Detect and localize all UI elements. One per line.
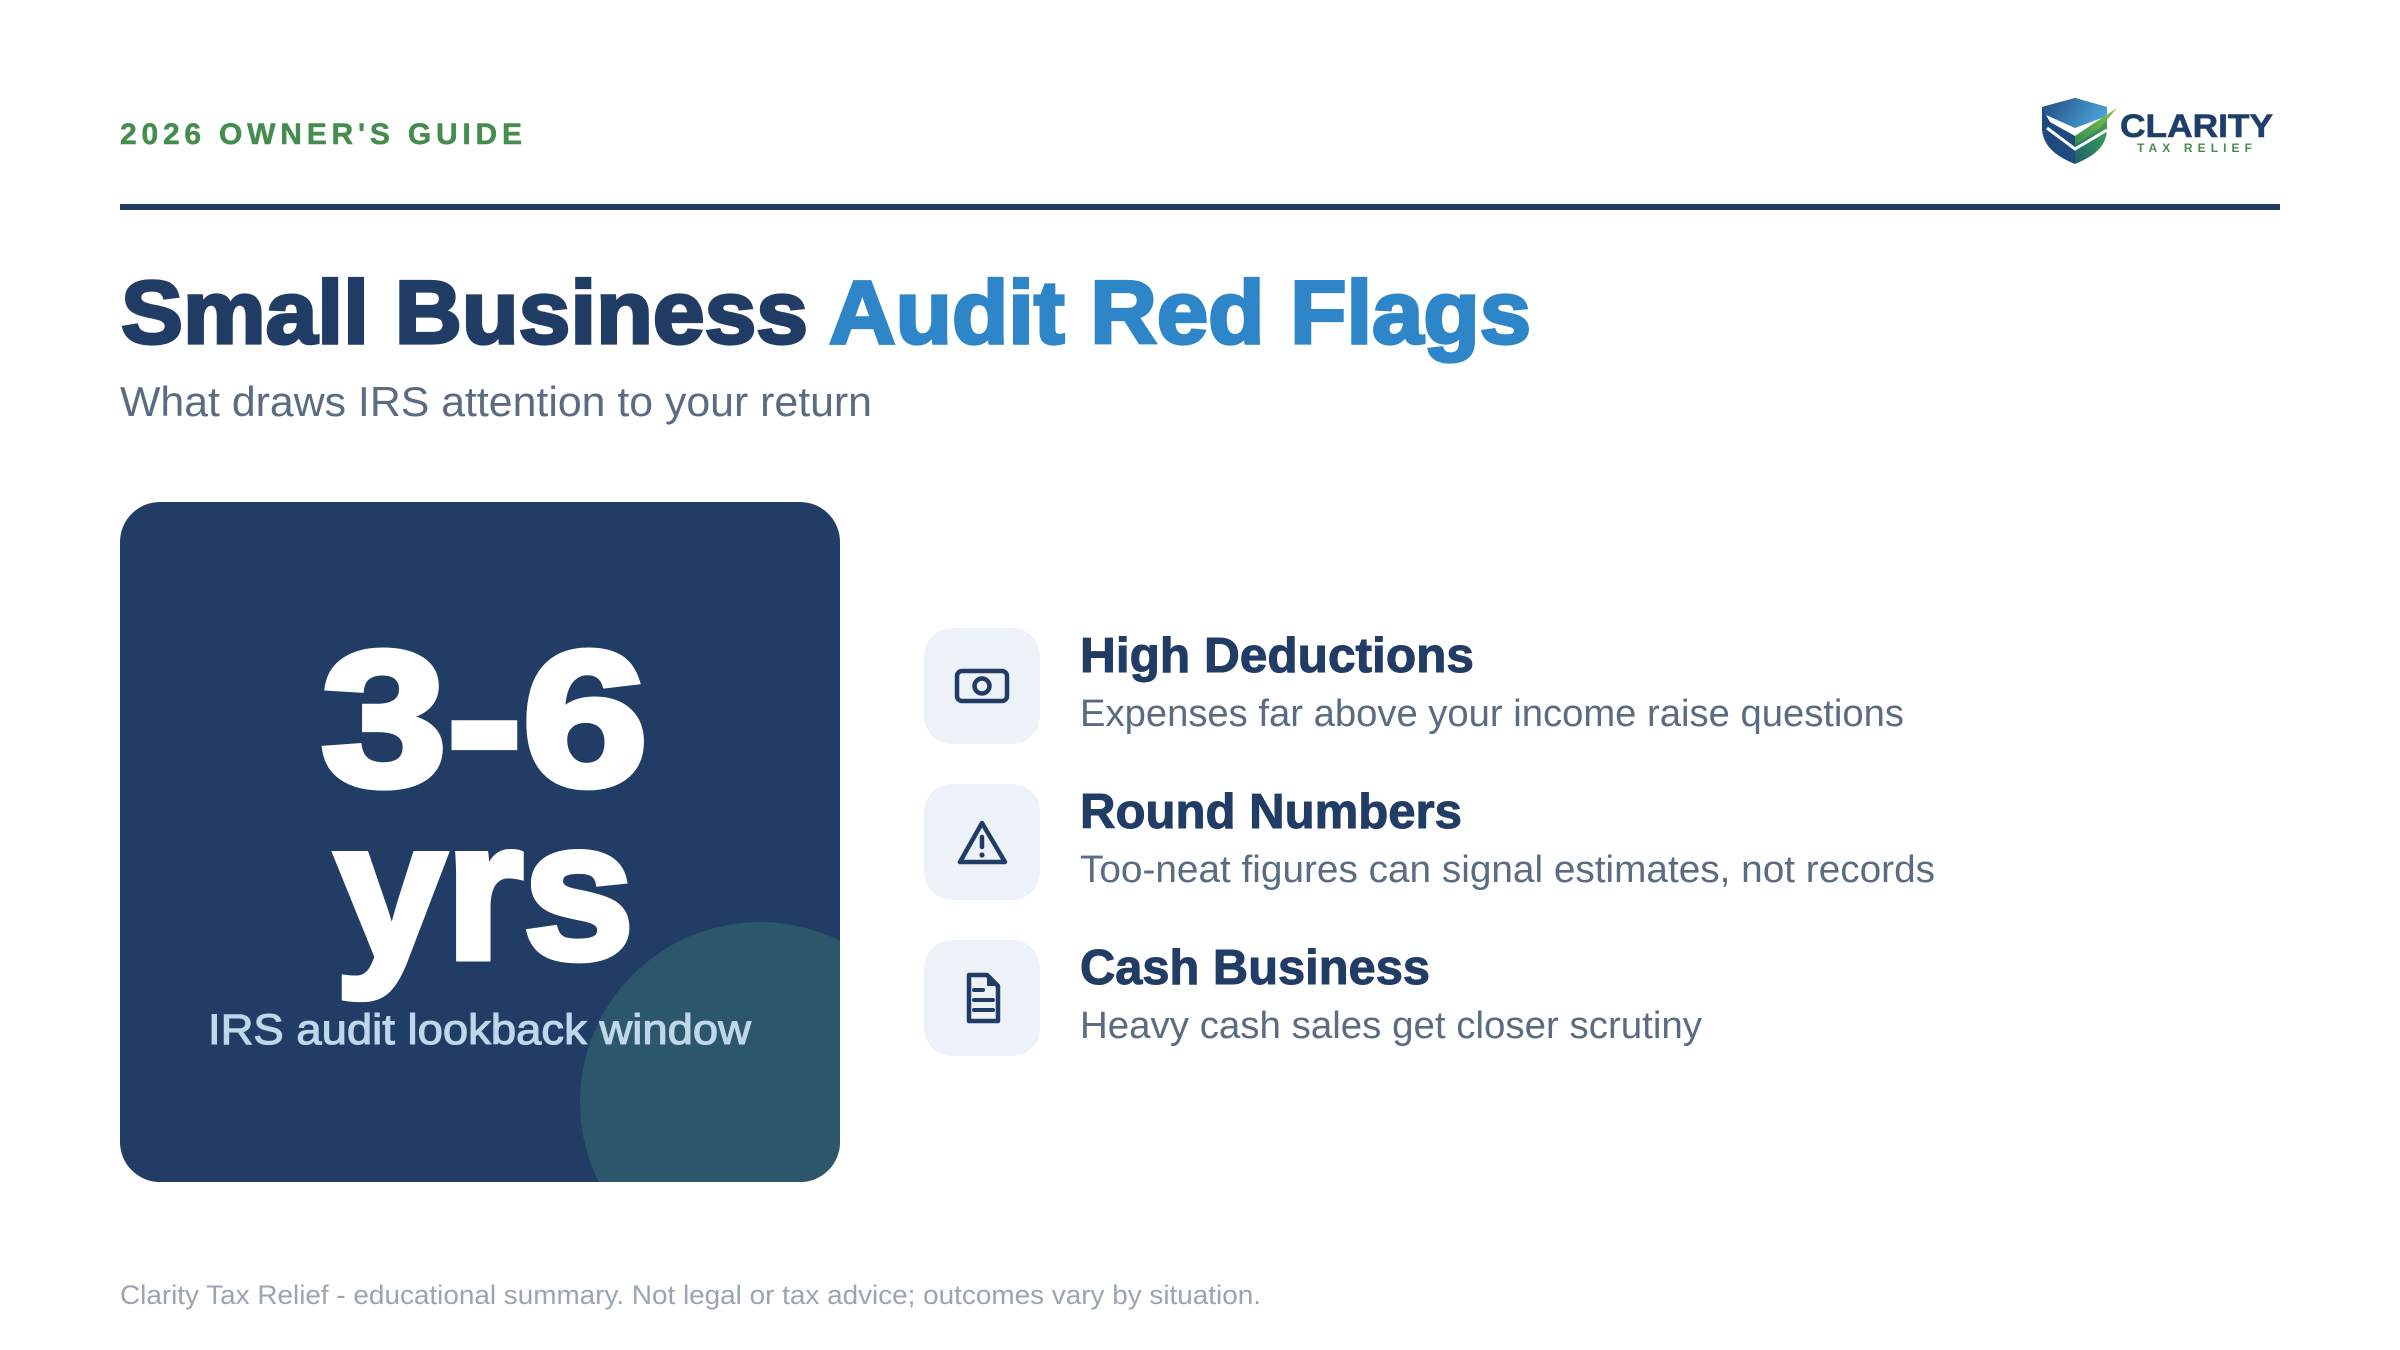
description: Expenses far above your income raise questions bbox=[1080, 693, 1904, 735]
big stat: 3-6 bbox=[321, 611, 648, 826]
heading: Cash Business bbox=[1080, 941, 1430, 995]
icon: cash bbox=[924, 628, 1040, 744]
item: round numbers bbox=[924, 784, 1935, 900]
logo wordmark: CLARITY bbox=[2120, 108, 2273, 144]
subtitle: What draws IRS attention to your return bbox=[120, 378, 872, 425]
heading: Round Numbers bbox=[1080, 785, 1462, 839]
footer disclaimer: Clarity Tax Relief - educational summary. Not legal or tax advice; outcomes vary by situation. bbox=[120, 1280, 1261, 1310]
item: high deductions bbox=[924, 628, 1904, 744]
big stat: yrs bbox=[335, 781, 634, 1000]
logo: Clarity Tax Relief bbox=[2042, 98, 2273, 164]
logo tagline: TAX RELIEF bbox=[2137, 141, 2252, 155]
eyebrow: 2026 OWNER'S GUIDE bbox=[120, 118, 522, 151]
item: cash business bbox=[924, 940, 1702, 1056]
big stat bbox=[321, 611, 648, 1000]
icon: warning bbox=[924, 784, 1040, 900]
panel: stat bbox=[120, 502, 840, 1182]
title: Small Business bbox=[121, 262, 808, 362]
title: Audit Red Flags bbox=[829, 262, 1531, 362]
description: Too-neat figures can signal estimates, not records bbox=[1080, 849, 1935, 891]
heading: High Deductions bbox=[1080, 629, 1474, 683]
title bbox=[121, 262, 1531, 362]
stat caption: IRS audit lookback window bbox=[208, 1006, 752, 1054]
description: Heavy cash sales get closer scrutiny bbox=[1080, 1005, 1702, 1047]
icon: document bbox=[924, 940, 1040, 1056]
icon: shield bbox=[2042, 98, 2117, 164]
